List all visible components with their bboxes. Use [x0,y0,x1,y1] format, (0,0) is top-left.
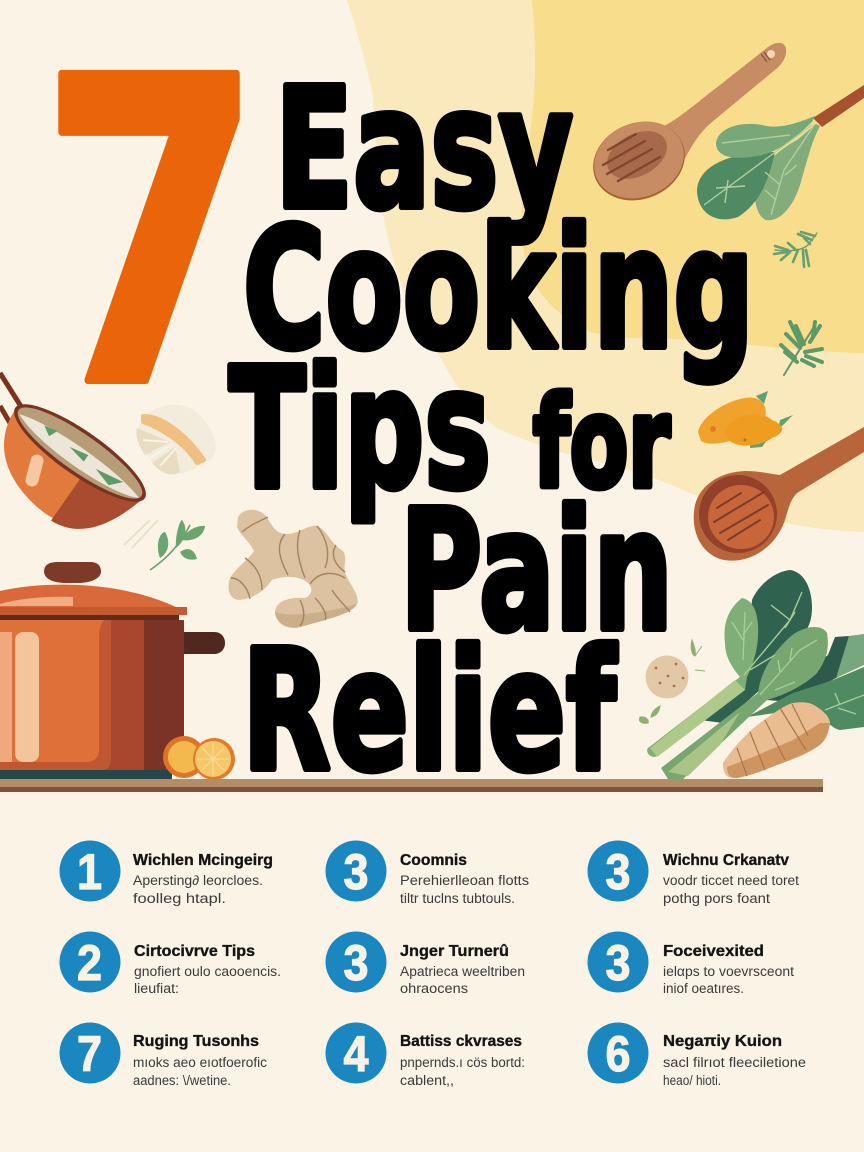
icon: garlic bulb [136,405,216,474]
tip 1: Wichlen Mcingeirg [133,852,273,869]
tip 2: 2 [77,935,102,991]
tip 4: 3 [344,844,368,900]
tip 5: Jnger Turnerû [400,943,509,960]
tip 9: Negaπiy Kuion [663,1033,782,1050]
tip 5: Apatrieca weeltriben [400,964,525,979]
tip 5: ohraocens [400,981,468,996]
tip 2 [60,932,281,996]
icon: parsley sprig [781,322,822,375]
tip 2: lieufiat: [134,981,179,996]
icon: herb leaf sprig [124,520,205,570]
tip 3 [60,1022,267,1088]
title: Pain [400,476,673,668]
tip 6 [326,1022,525,1088]
tip 8: iniof oeatıres. [663,981,744,996]
tip 3: Ruging Tusonhs [133,1033,259,1050]
icon: tilted soup bowl [0,373,157,557]
title: Easy [275,54,573,246]
tip 7 [588,840,799,906]
tip 9: heao/ hioti. [663,1073,721,1088]
title: Relief [242,616,617,808]
tip 6: Battiss ckvrases [400,1033,522,1050]
tip 7: Wichnu Crkanatv [663,852,789,869]
title [229,54,754,808]
tip 9 [588,1022,806,1088]
tip 4: Coomnis [400,852,467,869]
icon: orange slices [163,736,235,780]
icon: cooking pot [0,562,225,779]
tip 1: Apersting∂ leorcloes. [133,873,263,888]
tip 8: Foceivexited [663,943,764,960]
tip 6: cablent,, [400,1073,454,1088]
tip 3: mıoks aeo eıotfoerofic [133,1055,267,1070]
icon: wooden spoon top [581,43,786,214]
icon: ginger root [228,510,358,628]
tip 1: 1 [77,844,102,900]
icon: small herb sprig [774,232,817,267]
tip 7: pothg pors foant [663,891,770,906]
tip 4: tiltr tuclns tubtouls. [400,891,515,906]
wooden shelf [0,779,823,792]
icon: turmeric roots [698,391,793,448]
title: Tips [229,334,491,526]
tip 7: voodr ticcet need toret [663,873,799,888]
tip 4 [326,840,529,906]
title: for [533,371,670,516]
tip 3: 7 [77,1026,102,1082]
tip 4: Perehierlleoan flotts [400,873,529,888]
tip 5: 3 [344,935,368,991]
tip 5 [326,932,525,996]
tip 8: ielαps to voevrsceont [663,964,794,979]
icon: bok choy, seed and root [639,570,864,779]
icon: terracotta spoon right [694,427,864,561]
icon: spinach leaves with handle [697,85,864,220]
tip 1 [60,840,273,906]
big orange number 7: 7 [40,0,262,479]
tip 1: foolleg htapl. [133,891,226,906]
tip 2: gnofiert oulo caooencis. [134,964,281,979]
tip 2: Cirtocivrve Tips [134,943,255,960]
tip 6: 4 [344,1026,369,1082]
tip 9: sacl filrıot fleeciletione [663,1055,806,1070]
tip 3: aadnes: \/wetine. [133,1073,231,1088]
tip 8 [588,932,794,996]
tip 6: pnpernds.ı cös bortd: [400,1055,525,1070]
tip 8: 3 [606,935,630,991]
tip 7: 3 [606,844,630,900]
tip 9: 6 [606,1026,630,1082]
